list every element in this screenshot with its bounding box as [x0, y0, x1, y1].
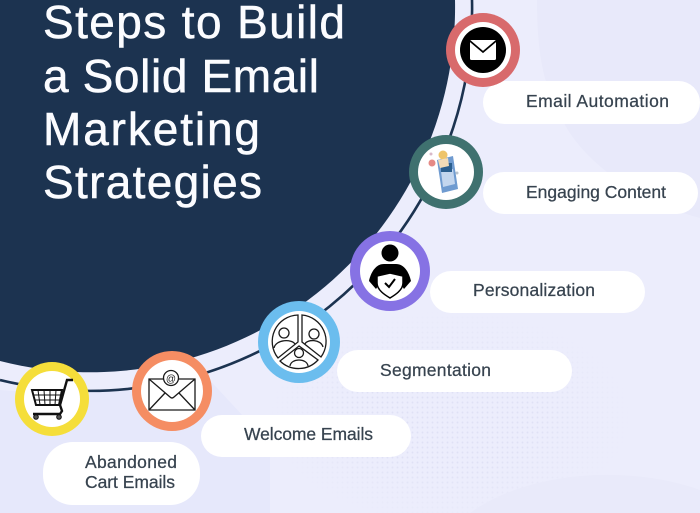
- label pill: engaging content: Engaging Content: [526, 182, 666, 202]
- label pill: segmentation: [337, 350, 572, 392]
- label pill: personalization: [430, 271, 645, 313]
- connecting curved line: [0, 0, 472, 391]
- icon: shopping cart: [15, 362, 89, 436]
- icon: envelope with at sign: @: [166, 374, 176, 385]
- label pill: abandoned cart emails: [43, 442, 200, 505]
- label pill: abandoned cart emails: Abandoned: [85, 452, 177, 472]
- label pill: email automation: Email Automation: [526, 91, 669, 111]
- title: [43, 0, 345, 208]
- step: abandoned cart emails: [15, 362, 200, 505]
- icon: envelope with at sign: [132, 351, 212, 431]
- icon: phone with person: [409, 135, 483, 209]
- title: Marketing: [43, 103, 260, 155]
- label pill: engaging content: [483, 172, 698, 214]
- label pill: segmentation: Segmentation: [380, 360, 491, 380]
- label pill: email automation: [483, 81, 700, 124]
- title: a Solid Email: [43, 50, 319, 102]
- label pill: welcome emails: Welcome Emails: [244, 424, 373, 444]
- label pill: abandoned cart emails: Cart Emails: [85, 472, 175, 492]
- dark title panel: [0, 0, 455, 372]
- title: Strategies: [43, 156, 262, 208]
- step: engaging content: [409, 135, 698, 214]
- icon: person holding shield: [350, 231, 430, 311]
- icon: envelope on black circle: [446, 13, 520, 87]
- label pill: welcome emails: [201, 415, 411, 457]
- label pill: personalization: Personalization: [473, 280, 595, 300]
- icon: segmented audience circle: [258, 301, 340, 383]
- step: welcome emails: [132, 351, 411, 457]
- step: personalization: [350, 231, 645, 313]
- step: email automation: [446, 13, 700, 124]
- step: segmentation: [258, 301, 572, 392]
